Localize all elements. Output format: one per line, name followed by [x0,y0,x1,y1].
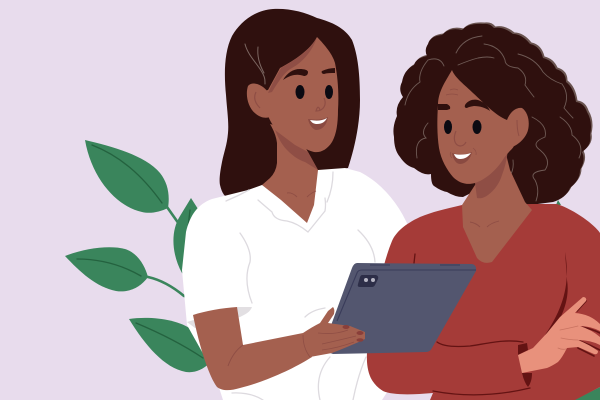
hand creases [558,326,578,349]
tablet edge lines [337,265,476,321]
neck [262,124,318,223]
green leaf bottom right [574,387,600,400]
neck shadow [475,150,508,198]
eyebrows [283,68,335,80]
crossed arm hand [518,297,600,373]
camera [358,275,378,287]
mouth [308,117,328,130]
nose [454,131,466,146]
ear [247,84,272,118]
eyes [296,85,333,99]
collarbones [287,191,316,197]
face [265,37,338,152]
red sweater [367,204,600,400]
sleeve opening [187,307,252,328]
nose [316,98,325,111]
small leaf tip behind the shoulder [556,200,561,205]
ear [507,108,529,147]
finger shadows [577,301,600,356]
sleeve shadow [545,252,568,335]
eyes [444,120,482,134]
white shirt [182,168,412,400]
hand holding the tablet [303,307,365,357]
sweater folds [414,254,530,395]
face [437,70,514,184]
fingernails [342,325,364,342]
hair highlights [245,44,265,84]
eyebrows [438,100,490,111]
curly hair [393,22,592,205]
hairline shadow on face [268,37,317,93]
cuff shadow [518,343,532,387]
hair highlights [405,36,581,201]
finger lines [303,330,356,357]
shirt wrinkles and collar [226,172,375,400]
collarbones [470,221,499,227]
forehead and cheek lines [446,89,476,158]
tablet [322,263,476,354]
neck shadow [275,130,318,170]
arm [193,307,312,390]
woman right: curly hair, red sweater [367,22,600,400]
hair [220,9,360,198]
neck [462,150,532,263]
tablet body [322,263,476,354]
plant: green leaves behind the figures [65,140,210,372]
woman left: long dark hair, white shirt [182,9,412,400]
mouth [452,152,472,164]
